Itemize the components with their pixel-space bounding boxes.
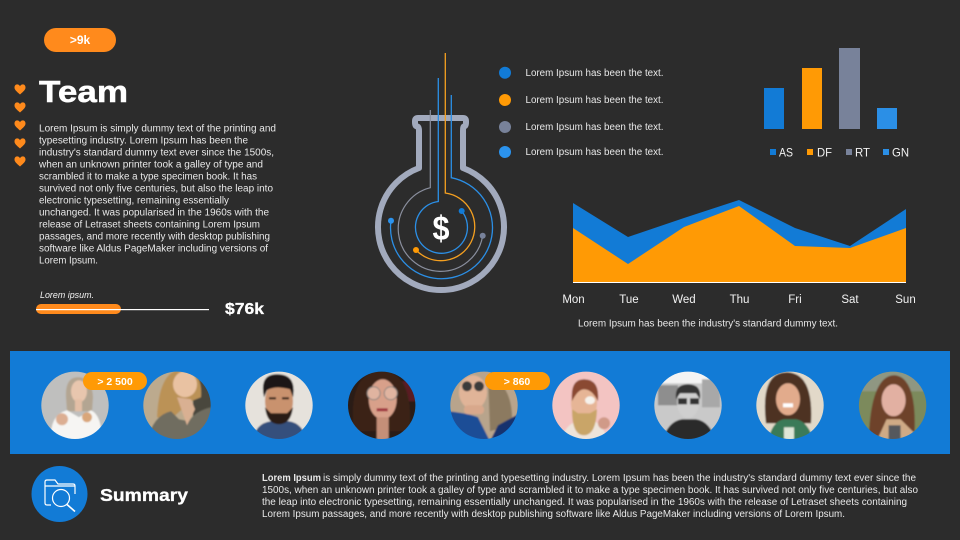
area chart: Mon to Sun xyxy=(562,200,916,306)
text block: summary xyxy=(262,473,918,520)
icon: folder with magnifier xyxy=(32,466,88,522)
photo: woman in white shirt xyxy=(41,372,109,439)
bar chart: AS DF RT GN: RT xyxy=(855,145,871,159)
progress bar with value xyxy=(36,290,264,318)
photo: woman with long brown hair xyxy=(858,372,926,439)
area chart: Mon to Sun: Tue xyxy=(619,294,639,306)
text block: team description: software like Aldus PageMaker including versions of xyxy=(39,244,268,254)
progress bar with value: $76k xyxy=(225,301,264,318)
panel: team photo banner xyxy=(10,351,950,454)
area chart: Mon to Sun: Thu xyxy=(730,294,749,306)
text block: team description: scrambled it to make a type specimen book. It has xyxy=(39,172,257,182)
icon: column of hearts xyxy=(14,84,26,166)
text block: team description: typesetting industry. Lorem Ipsum has been the xyxy=(39,136,248,146)
legend: coloured dots with text xyxy=(499,67,664,158)
text block: summary: the leap into electronic typesetting, remaining essentially unchanged. It was popularised in the 1960s with the release of Letraset sheets containing xyxy=(262,497,907,508)
text block: summary: Lorem Ipsum xyxy=(262,473,321,484)
text block: team description xyxy=(38,124,276,266)
badge: >9k: >9k xyxy=(70,33,91,47)
badge: > 860: > 860 xyxy=(504,376,530,388)
badge: > 860 xyxy=(485,372,550,390)
area chart: Mon to Sun: Sun xyxy=(895,294,916,306)
area chart: Mon to Sun: Wed xyxy=(672,294,696,306)
icon: flask with circuit lines and dollar sign xyxy=(378,53,504,290)
text block: team description: survived not only five centuries, but also the leap into xyxy=(39,184,273,194)
text block: team description: Lorem Ipsum. xyxy=(39,256,98,266)
photo: smiling blonde woman xyxy=(143,372,211,439)
legend: coloured dots with text: Lorem Ipsum has been the text. xyxy=(526,122,664,133)
photo: woman with glasses xyxy=(348,372,416,439)
text block: team description: unchanged. It was popularised in the 1960s with the xyxy=(39,208,269,218)
text block: summary: is simply dummy text of the printing and typesetting industry. Lorem Ipsum has been the industry's standard dummy text ever since the xyxy=(323,473,916,484)
badge: > 2 500 xyxy=(83,372,147,390)
text block: summary: Lorem Ipsum passages, and more recently with desktop publishing software like Aldus PageMaker including versions of Lorem Ipsum. xyxy=(262,509,845,520)
photo: man with glasses, black and white xyxy=(654,372,722,439)
text block: team description: Lorem Ipsum is simply dummy text of the printing and xyxy=(39,124,276,134)
chart caption: Lorem Ipsum has been the industry's standard dummy text. xyxy=(578,318,838,330)
text block: summary: 1500s, when an unknown printer took a galley of type and scrambled it to make a type specimen book. It has survived not only five centuries, but also xyxy=(262,485,918,496)
area chart: Mon to Sun: Fri xyxy=(788,294,802,306)
area chart: Mon to Sun: Sat xyxy=(841,294,859,306)
legend: coloured dots with text: Lorem Ipsum has been the text. xyxy=(526,68,664,79)
photo: bearded man xyxy=(245,372,313,439)
bar chart: AS DF RT GN: GN xyxy=(892,145,909,159)
photo: smiling woman with curly hair xyxy=(756,372,824,439)
badge: > 2 500: > 2 500 xyxy=(97,376,133,388)
bar chart: AS DF RT GN xyxy=(764,48,909,159)
text block: team description: passages, and more recently with desktop publishing xyxy=(39,232,270,242)
photo: woman resting chin on hand xyxy=(450,372,518,439)
legend: coloured dots with text: Lorem Ipsum has been the text. xyxy=(526,147,664,158)
bar chart: AS DF RT GN: AS xyxy=(779,145,793,159)
text block: team description: release of Letraset sheets containing Lorem Ipsum xyxy=(39,220,260,230)
text block: team description: electronic typesetting, remaining essentially xyxy=(39,196,229,206)
icon: flask with circuit lines and dollar sign: $ xyxy=(432,210,450,248)
text block: team description: when an unknown printer took a galley of type and xyxy=(38,160,263,170)
bar chart: AS DF RT GN: DF xyxy=(817,145,832,159)
legend: coloured dots with text: Lorem Ipsum has been the text. xyxy=(526,95,664,106)
heading: Team: Team xyxy=(39,74,128,109)
text block: team description: industry's standard dummy text ever since the 1500s, xyxy=(39,148,274,158)
area chart: Mon to Sun: Mon xyxy=(562,294,585,306)
photo: man with beard on pink xyxy=(552,372,620,439)
progress bar with value: Lorem ipsum. xyxy=(40,290,94,301)
heading: Summary: Summary xyxy=(100,485,188,505)
badge: >9k xyxy=(44,28,116,52)
